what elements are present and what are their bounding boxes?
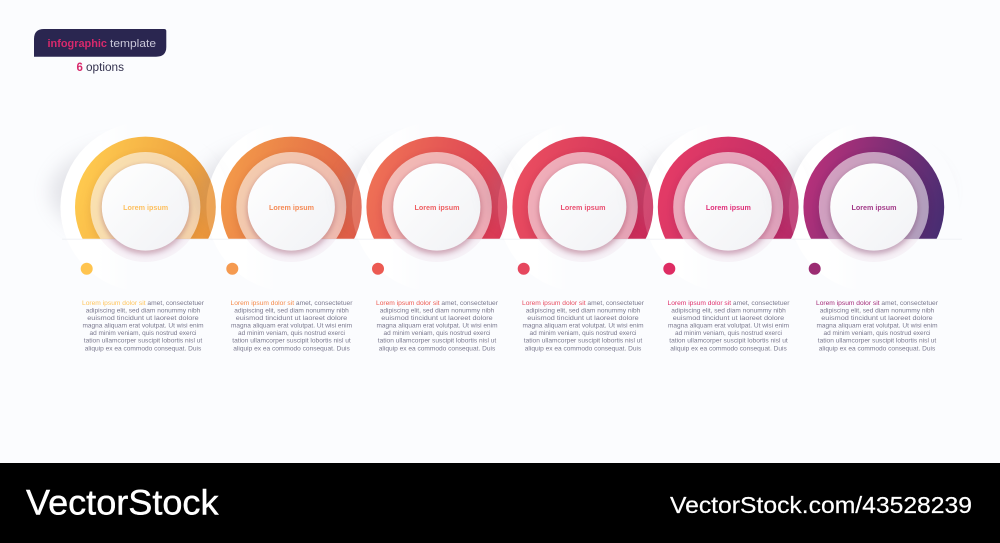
text block 1 xyxy=(82,300,205,352)
text block 5: aliquip ex ea commodo consequat. Duis xyxy=(670,345,787,352)
header badge: infographic xyxy=(48,38,107,50)
text block 4 xyxy=(522,300,645,352)
text block 1: magna aliquam erat volutpat. Ut wisi enim xyxy=(82,323,204,330)
text block 6 xyxy=(816,300,939,352)
option 1 circle xyxy=(48,136,216,262)
option 3 circle xyxy=(340,136,508,262)
text block 3: euismod tincidunt ut laoreet dolore xyxy=(381,315,493,322)
text block 4: magna aliquam erat volutpat. Ut wisi enim xyxy=(522,323,644,330)
text block 3: aliquip ex ea commodo consequat. Duis xyxy=(379,345,496,352)
text block 3: Lorem ipsum dolor sit amet, consectetuer xyxy=(376,300,499,307)
text block 2 xyxy=(230,300,353,352)
footer logo: VectorStock xyxy=(26,484,219,522)
option 1 circle: Lorem ipsum xyxy=(123,203,168,212)
text block 4: euismod tincidunt ut laoreet dolore xyxy=(527,315,639,322)
text block 2: adipiscing elit, sed diam nonummy nibh xyxy=(234,308,349,314)
text block 3: tation ullamcorper suscipit lobortis nisl ut xyxy=(378,338,496,345)
text block 4: Lorem ipsum dolor sit amet, consectetuer xyxy=(522,300,645,307)
white crescents behind circles xyxy=(60,122,959,292)
text block 6: adipiscing elit, sed diam nonummy nibh xyxy=(820,308,935,314)
timeline dots xyxy=(81,263,821,275)
text block 1: tation ullamcorper suscipit lobortis nisl ut xyxy=(84,338,202,345)
footer bar xyxy=(0,463,1000,543)
text block 5: euismod tincidunt ut laoreet dolore xyxy=(673,315,785,322)
text block 5: magna aliquam erat volutpat. Ut wisi enim xyxy=(668,323,790,330)
footer url: VectorStock.com/43528239 xyxy=(670,492,972,518)
text block 1: euismod tincidunt ut laoreet dolore xyxy=(87,315,199,322)
text block 3: adipiscing elit, sed diam nonummy nibh xyxy=(380,308,495,314)
header badge: template xyxy=(110,38,156,50)
option 4 circle: Lorem ipsum xyxy=(560,203,606,212)
option 6 circle: Lorem ipsum xyxy=(852,203,897,212)
text block 2: ad minim veniam, quis nostrud exerci xyxy=(238,330,346,337)
text block 5 xyxy=(668,300,790,352)
option 6 circle xyxy=(778,136,944,262)
text block 6: magna aliquam erat volutpat. Ut wisi enim xyxy=(816,323,938,330)
text block 5: tation ullamcorper suscipit lobortis nisl ut xyxy=(669,338,788,345)
text block 1: Lorem ipsum dolor sit amet, consectetuer xyxy=(82,300,205,307)
text block 3: magna aliquam erat volutpat. Ut wisi enim xyxy=(376,323,498,330)
text block 1: ad minim veniam, quis nostrud exerci xyxy=(90,330,197,337)
text block 6: Lorem ipsum dolor sit amet, consectetuer xyxy=(816,300,939,307)
text block 4: aliquip ex ea commodo consequat. Duis xyxy=(525,345,642,352)
text block 2: magna aliquam erat volutpat. Ut wisi enim xyxy=(231,323,353,330)
text block 2: euismod tincidunt ut laoreet dolore xyxy=(236,315,348,322)
option 2 circle xyxy=(194,136,362,262)
text block 3 xyxy=(376,300,499,352)
option 2 circle: Lorem ipsum xyxy=(269,203,314,212)
text block 6: ad minim veniam, quis nostrud exerci xyxy=(824,330,931,337)
horizontal base line xyxy=(62,239,962,240)
text block 5: ad minim veniam, quis nostrud exerci xyxy=(675,330,783,337)
text block 6: euismod tincidunt ut laoreet dolore xyxy=(821,315,933,322)
subtitle: 6 options: 6 xyxy=(76,62,83,74)
option 5 circle: Lorem ipsum xyxy=(706,203,751,212)
text block 3: ad minim veniam, quis nostrud exerci xyxy=(384,330,491,337)
text block 5: Lorem ipsum dolor sit amet, consectetuer xyxy=(668,300,790,307)
text block 4: tation ullamcorper suscipit lobortis nisl ut xyxy=(524,338,642,345)
text block 2: aliquip ex ea commodo consequat. Duis xyxy=(233,345,350,352)
text block 2: Lorem ipsum dolor sit amet, consectetuer xyxy=(230,300,353,307)
text block 1: adipiscing elit, sed diam nonummy nibh xyxy=(86,308,201,314)
text block 4: adipiscing elit, sed diam nonummy nibh xyxy=(526,308,641,314)
text block 1: aliquip ex ea commodo consequat. Duis xyxy=(85,345,202,352)
text block 4: ad minim veniam, quis nostrud exerci xyxy=(530,330,637,337)
subtitle: 6 options: options xyxy=(86,62,124,74)
option 3 circle: Lorem ipsum xyxy=(414,203,460,212)
text block 2: tation ullamcorper suscipit lobortis nisl ut xyxy=(232,338,351,345)
text block 5: adipiscing elit, sed diam nonummy nibh xyxy=(671,308,786,314)
option 4 circle xyxy=(486,136,654,262)
text block 6: tation ullamcorper suscipit lobortis nisl ut xyxy=(818,338,936,345)
text block 6: aliquip ex ea commodo consequat. Duis xyxy=(819,345,936,352)
option 5 circle xyxy=(632,136,799,262)
header badge xyxy=(34,29,166,57)
